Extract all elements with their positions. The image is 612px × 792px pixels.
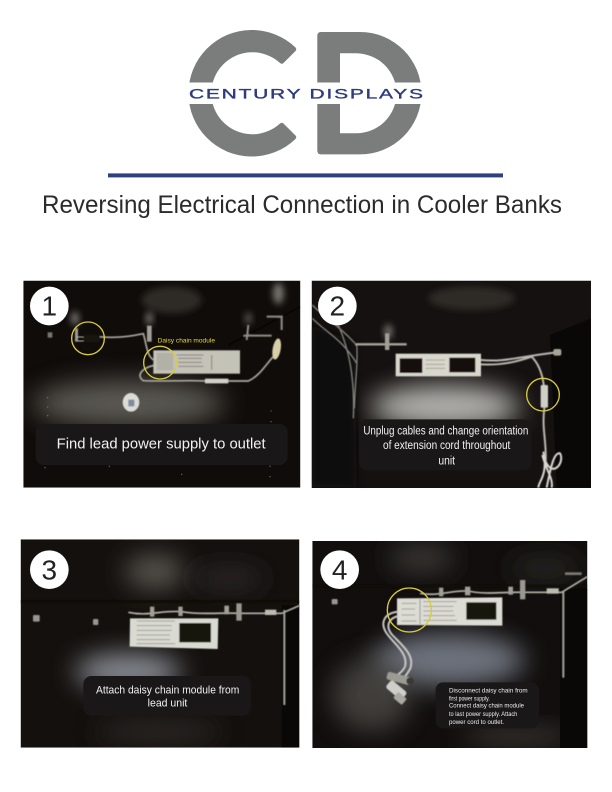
caption: step 2 bbox=[359, 419, 532, 470]
caption: step 4 bbox=[436, 682, 539, 728]
caption: step 4: Disconnect daisy chain from bbox=[449, 687, 528, 694]
logo wordmark: CENTURY DISPLAYS bbox=[189, 86, 423, 102]
caption: step 4: to last power supply. Attach bbox=[449, 711, 518, 718]
caption: step 4: power cord to outlet. bbox=[449, 719, 504, 726]
divider rule bbox=[108, 173, 503, 177]
step number 3 bbox=[30, 550, 69, 589]
caption: step 1: Find lead power supply to outlet bbox=[57, 436, 266, 452]
caption: step 4: first power supply. bbox=[449, 696, 490, 703]
step number 3: 3 bbox=[42, 554, 57, 585]
label: daisy chain module: Daisy chain module bbox=[158, 337, 215, 344]
caption: step 3: Attach daisy chain module from bbox=[96, 684, 239, 696]
step number 4: 4 bbox=[332, 554, 347, 585]
photo: step 3 cabinet bbox=[21, 539, 299, 748]
logo: Century Displays bbox=[185, 30, 427, 157]
step number 4 bbox=[320, 550, 359, 589]
step number 2 bbox=[318, 287, 357, 325]
step number 1: 1 bbox=[42, 291, 57, 322]
caption: step 1 bbox=[36, 424, 288, 465]
caption: step 2: Unplug cables and change orientation bbox=[363, 423, 528, 437]
panel: step 1 bbox=[23, 281, 300, 488]
photo: step 1 cabinet bbox=[23, 281, 300, 488]
title: Reversing Electrical Connection in Cooler Banks bbox=[42, 191, 562, 219]
caption: step 3: lead unit bbox=[148, 697, 187, 709]
logo letter D bbox=[317, 32, 421, 154]
highlight circle: module end bbox=[387, 588, 431, 632]
highlight circle: plug bbox=[72, 322, 104, 355]
highlight circle: connector bbox=[527, 378, 559, 411]
panel: step 2 bbox=[312, 281, 591, 488]
step number 2: 2 bbox=[330, 291, 345, 322]
caption: step 3 bbox=[83, 676, 251, 716]
step number 1 bbox=[30, 287, 69, 325]
photo: step 4 cabinet bbox=[312, 541, 587, 748]
caption: step 4: Connect daisy chain module bbox=[449, 703, 524, 710]
logo white band bbox=[185, 82, 427, 104]
panel: step 4 bbox=[312, 541, 587, 748]
panel: step 3 bbox=[21, 539, 299, 748]
logo letter C bbox=[188, 30, 296, 157]
photo: step 2 cabinet bbox=[312, 281, 591, 488]
caption: step 2: of extension cord throughout bbox=[383, 438, 511, 452]
highlight circle: daisy chain module bbox=[144, 346, 176, 379]
caption: step 2: unit bbox=[438, 453, 456, 467]
